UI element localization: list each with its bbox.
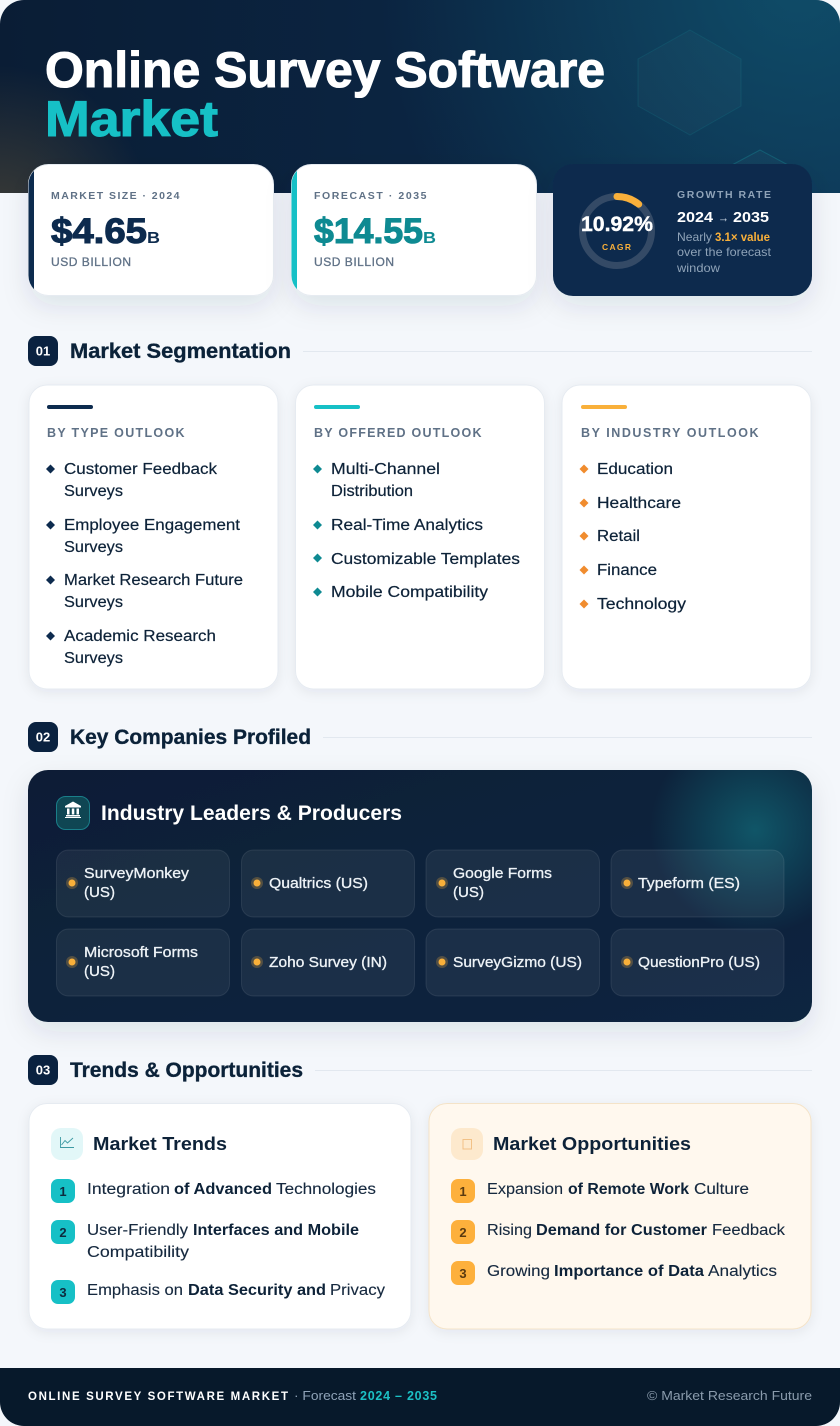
section heading 03: 03 <box>36 1062 50 1078</box>
stat card: forecast: $14.55 <box>314 212 423 251</box>
panel: by type outlook: Academic Research <box>64 628 216 645</box>
growth rate card: → <box>718 210 729 225</box>
stat card: forecast: B <box>423 230 436 247</box>
panel: by type outlook: Surveys <box>64 650 123 667</box>
chip: Zoho Survey: Zoho Survey (IN) <box>269 955 387 971</box>
trend 1: of Advanced <box>174 1181 272 1198</box>
section heading 02: 02 <box>36 730 50 744</box>
panel: market trends: Market Trends <box>93 1133 227 1154</box>
panel: by industry outlook: Education <box>597 461 673 478</box>
opportunity 1 <box>451 1179 749 1203</box>
panel: by type outlook: Surveys <box>64 594 123 611</box>
opportunity 3: 3 <box>459 1266 467 1281</box>
panel: by offered outlook: Customizable Templates <box>331 551 520 568</box>
trend 2: 2 <box>59 1225 67 1240</box>
header banner <box>0 0 840 193</box>
trend 3: Emphasis on <box>87 1282 183 1299</box>
panel: key companies: Industry Leaders & Producers <box>101 802 402 825</box>
trend 1: Integration <box>87 1181 170 1198</box>
opportunity 2: Demand for Customer <box>536 1222 707 1239</box>
trend 2: User-Friendly <box>87 1222 188 1239</box>
growth rate card: 3.1× value <box>715 230 770 244</box>
panel: by industry outlook <box>562 385 811 689</box>
chip: SurveyMonkey: SurveyMonkey <box>84 866 190 882</box>
stat card: forecast <box>291 164 536 296</box>
growth rate card: window <box>676 261 720 275</box>
CAGR donut <box>581 196 653 266</box>
growth rate card: 2024 <box>677 209 714 226</box>
panel: by offered outlook: Real-Time Analytics <box>331 517 483 534</box>
panel: by industry outlook: Healthcare <box>597 495 681 512</box>
icon: opportunity placeholder <box>451 1128 483 1160</box>
title <box>45 42 605 147</box>
trend 3: Privacy <box>330 1282 385 1299</box>
chip: Google Forms <box>426 850 600 917</box>
stat card: market size <box>28 164 274 296</box>
section heading 03: Trends & Opportunities <box>70 1059 303 1082</box>
growth rate card: GROWTH RATE <box>677 189 771 201</box>
chip: Microsoft Forms <box>56 929 230 996</box>
stat card: market size: USD BILLION <box>51 255 131 269</box>
chip: Google Forms: Google Forms <box>453 866 552 882</box>
section heading 03 <box>28 1055 812 1085</box>
chip: SurveyMonkey: (US) <box>84 885 115 901</box>
opportunity 3 <box>451 1261 777 1285</box>
growth rate card: Nearly <box>677 230 712 244</box>
opportunity 3: Analytics <box>708 1263 777 1280</box>
chip: SurveyGizmo <box>426 929 600 996</box>
icon: bank <box>56 796 90 830</box>
chip: Microsoft Forms: (US) <box>84 964 115 980</box>
chip: QuestionPro <box>611 929 784 996</box>
panel: by type outlook: BY TYPE OUTLOOK <box>47 426 184 440</box>
stat card: forecast: USD BILLION <box>314 255 394 269</box>
growth rate card: over the forecast <box>677 245 772 259</box>
opportunity 3: Importance of Data <box>554 1263 704 1280</box>
opportunity 3: Growing <box>487 1263 550 1280</box>
trend 3: Data Security and <box>188 1282 326 1299</box>
panel: by type outlook: Customer Feedback <box>64 461 217 478</box>
panel: by industry outlook: Finance <box>597 562 657 579</box>
chip: Google Forms: (US) <box>453 885 484 901</box>
trend 3: 3 <box>59 1285 67 1300</box>
chip: Qualtrics <box>242 850 414 917</box>
chip: Qualtrics: Qualtrics (US) <box>269 876 368 892</box>
trend 1: Technologies <box>276 1181 376 1198</box>
opportunity 2 <box>451 1220 785 1244</box>
trend 1 <box>51 1179 376 1203</box>
section heading 02 <box>28 722 812 752</box>
opportunity 2: 2 <box>459 1225 467 1240</box>
opportunity 1: Expansion <box>487 1181 563 1198</box>
icon: line chart <box>51 1128 83 1160</box>
panel: market opportunities: Market Opportunities <box>493 1133 691 1154</box>
trend 2 <box>51 1220 359 1261</box>
panel: by industry outlook: Technology <box>597 596 686 613</box>
stat card: market size: $4.65 <box>51 212 147 251</box>
panel: market trends <box>29 1104 411 1329</box>
growth rate card <box>553 164 812 296</box>
footer: · Forecast <box>294 1389 357 1403</box>
chip: QuestionPro: QuestionPro (US) <box>638 955 760 971</box>
trend 3 <box>51 1280 385 1304</box>
small hexagon decoration <box>730 150 790 166</box>
panel: by type outlook: Market Research Future <box>64 572 243 589</box>
chip: SurveyGizmo: SurveyGizmo (US) <box>453 955 582 971</box>
panel: by type outlook: Surveys <box>64 483 123 500</box>
panel: by industry outlook: BY INDUSTRY OUTLOOK <box>581 426 758 440</box>
footer: © Market Research Future <box>647 1389 812 1403</box>
stat card: market size: B <box>147 230 160 247</box>
opportunity 2: Rising <box>487 1222 532 1239</box>
chip: Typeform <box>611 850 784 917</box>
panel: by type outlook: Surveys <box>64 539 123 556</box>
chip: Zoho Survey <box>242 929 414 996</box>
section heading 01: 01 <box>36 344 50 358</box>
opportunity 2: Feedback <box>712 1222 785 1239</box>
chip: Typeform: Typeform (ES) <box>638 876 740 892</box>
title: Market <box>45 91 218 147</box>
panel: by offered outlook <box>296 385 544 689</box>
section heading 01: Market Segmentation <box>70 340 291 363</box>
panel: by type outlook <box>29 385 278 689</box>
stat card: forecast: FORECAST · 2035 <box>314 190 427 202</box>
opportunity 1: of Remote Work <box>568 1181 689 1198</box>
section heading 01 <box>28 336 812 366</box>
trend 1: 1 <box>59 1184 67 1199</box>
panel: by offered outlook: Mobile Compatibility <box>331 584 488 601</box>
opportunity 1: Culture <box>694 1181 749 1198</box>
opportunity 1: 1 <box>459 1184 467 1199</box>
trend 2: Compatibility <box>87 1244 189 1261</box>
panel: by type outlook: Employee Engagement <box>64 517 241 534</box>
panel: market opportunities <box>429 1104 811 1329</box>
CAGR donut: CAGR <box>602 242 631 252</box>
panel: by offered outlook: Multi-Channel <box>331 461 440 478</box>
footer <box>0 1368 840 1426</box>
hexagon decoration <box>638 30 741 135</box>
panel: by offered outlook: Distribution <box>331 483 413 500</box>
chip: Microsoft Forms: Microsoft Forms <box>84 945 198 961</box>
footer: 2024 – 2035 <box>360 1389 437 1403</box>
footer: ONLINE SURVEY SOFTWARE MARKET <box>28 1391 288 1403</box>
panel: by industry outlook: Retail <box>597 528 640 545</box>
section heading 02: Key Companies Profiled <box>70 726 311 749</box>
chip: SurveyMonkey <box>56 850 230 917</box>
panel: key companies <box>28 770 812 1022</box>
title: Online Survey Software <box>45 42 605 98</box>
growth rate card: 2035 <box>733 209 769 226</box>
CAGR donut: 10.92% <box>581 213 653 236</box>
stat card: market size: MARKET SIZE · 2024 <box>51 190 180 202</box>
trend 2: Interfaces and Mobile <box>193 1222 359 1239</box>
panel: by offered outlook: BY OFFERED OUTLOOK <box>314 426 482 440</box>
